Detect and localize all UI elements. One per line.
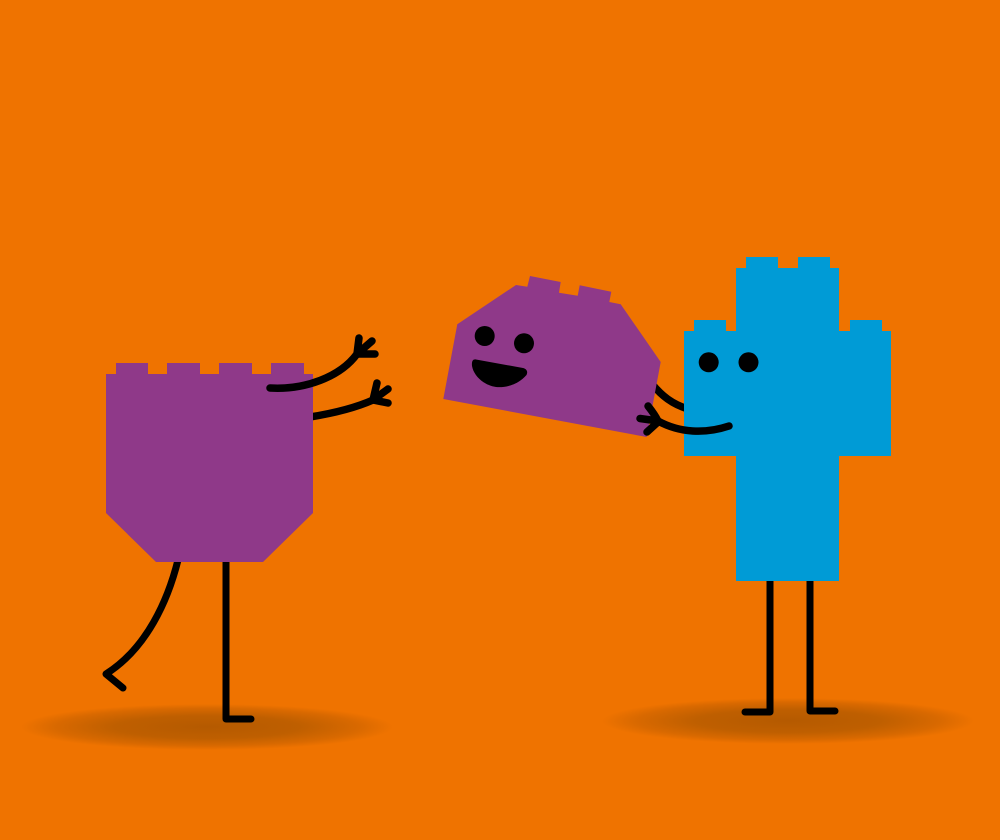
blue character: legs bbox=[745, 578, 835, 712]
blue character bbox=[684, 257, 891, 712]
left character: front arm bbox=[270, 338, 375, 388]
brick smile bbox=[472, 359, 527, 387]
blue character front arm bbox=[640, 406, 729, 432]
brick eyes bbox=[475, 326, 534, 353]
left character bbox=[106, 338, 388, 719]
ground shadow: right bbox=[602, 698, 974, 744]
middle tilted purple brick bbox=[443, 276, 661, 437]
blue character: eyes bbox=[699, 352, 758, 372]
left character: rear arm bbox=[310, 383, 388, 417]
left character: legs bbox=[106, 560, 251, 719]
ground shadow: left bbox=[21, 704, 393, 750]
left character: purple brick body bbox=[106, 363, 313, 562]
blue character: cross-shaped brick body bbox=[684, 257, 891, 581]
blue character rear arm bbox=[652, 384, 688, 409]
brick body bbox=[443, 276, 661, 437]
